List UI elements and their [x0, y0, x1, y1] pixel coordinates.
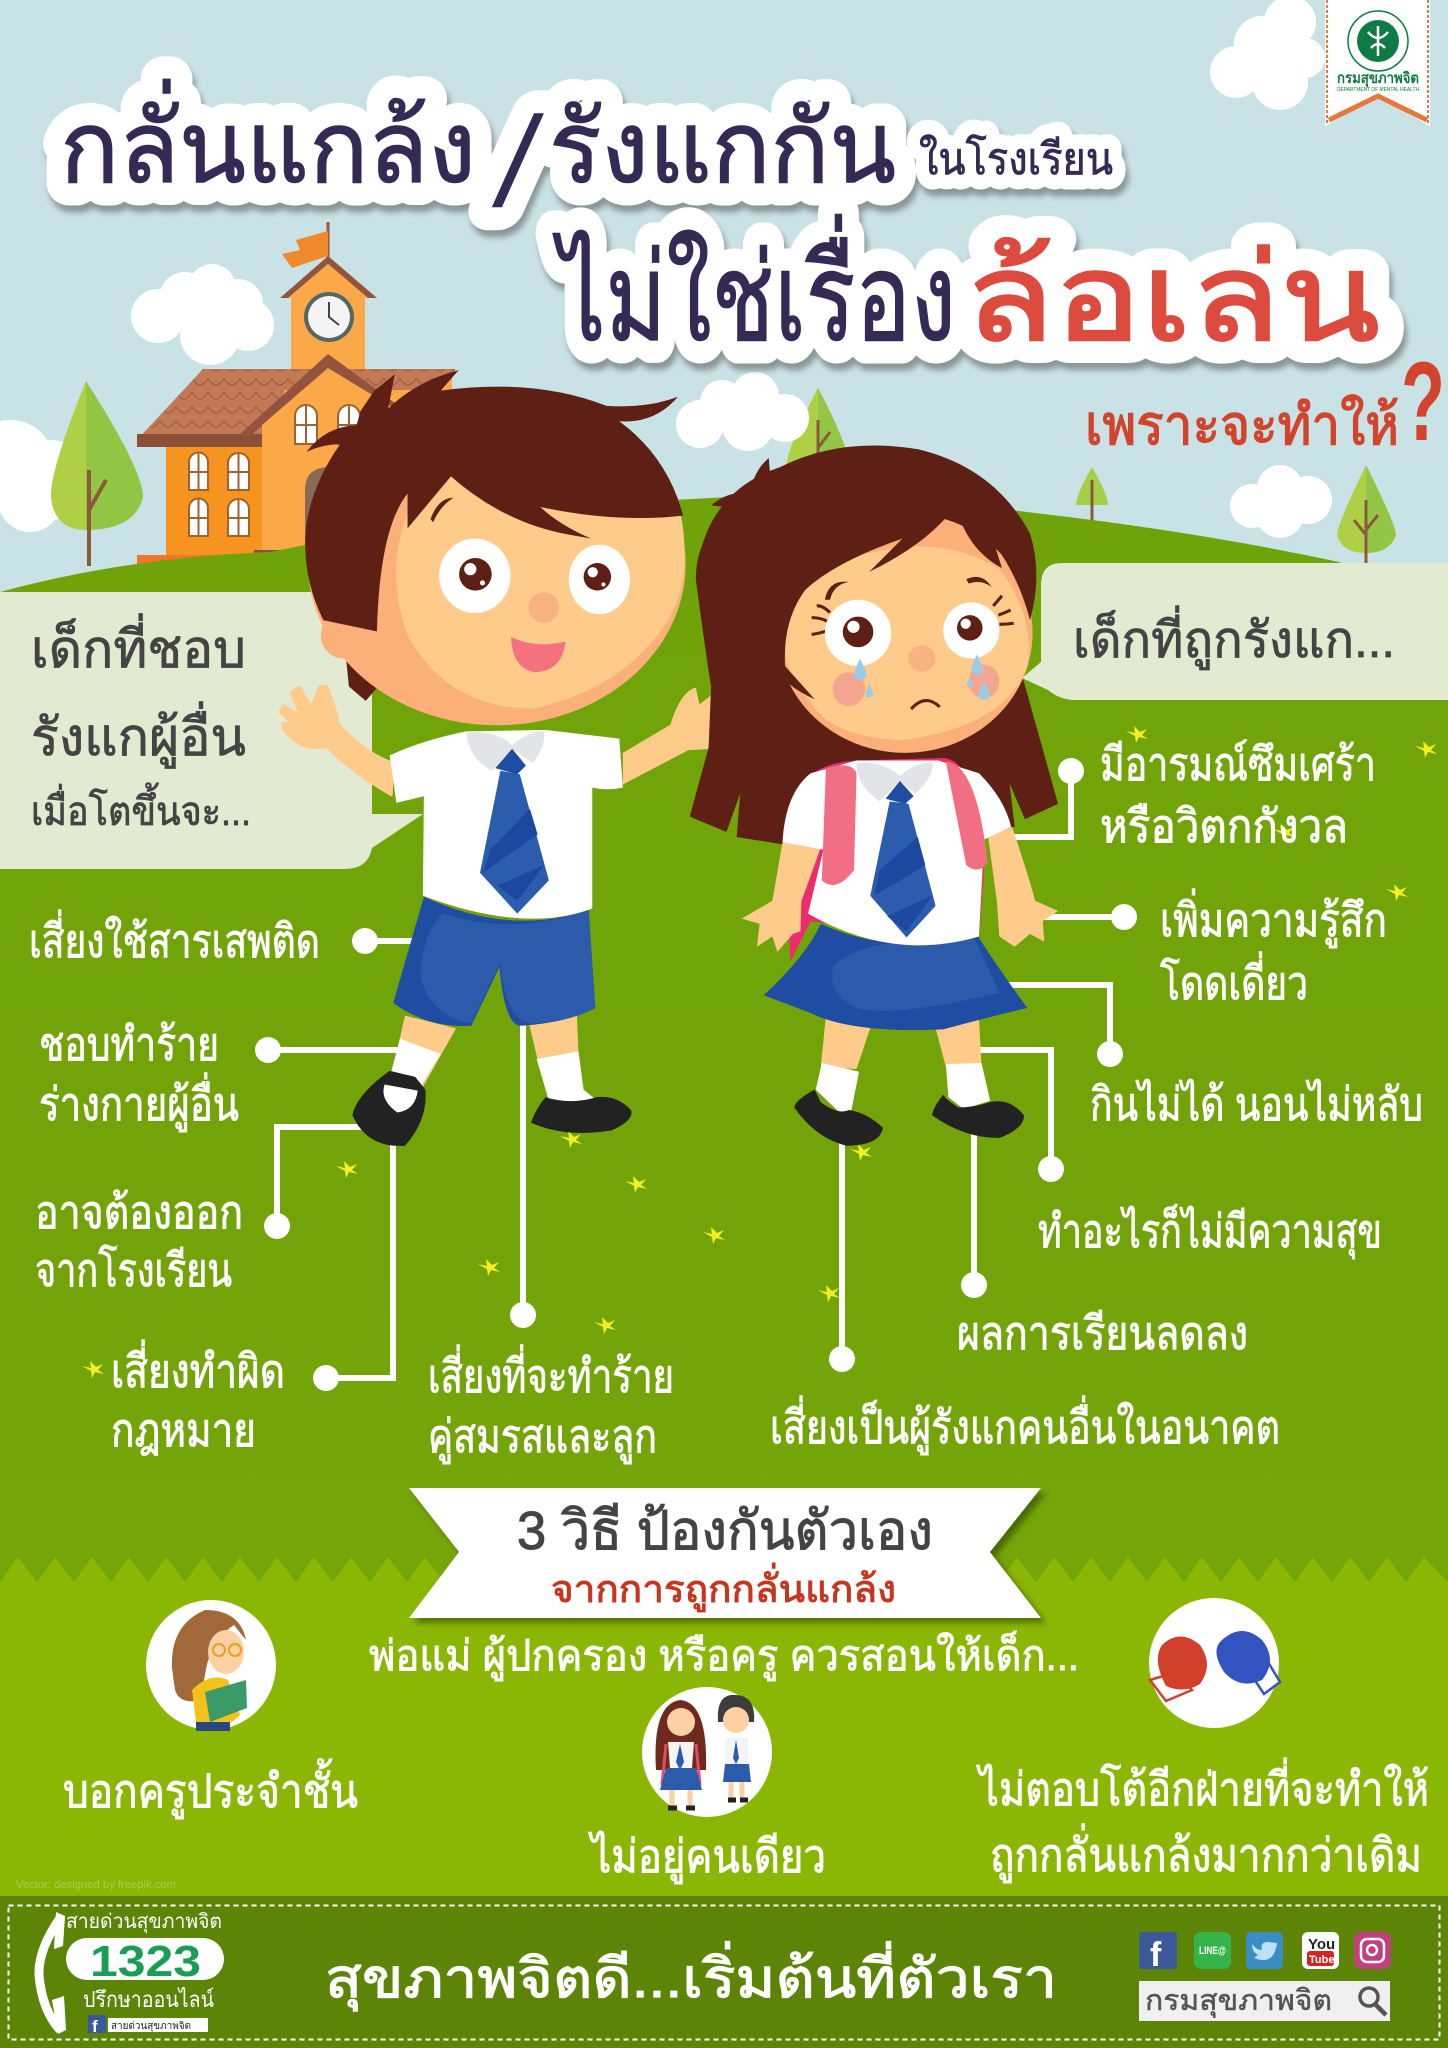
icon: teacher — [146, 1600, 276, 1731]
sky background — [0, 0, 1448, 640]
character: boy — [280, 370, 713, 1146]
cloud: beside school — [131, 264, 274, 365]
right bubble text: เด็กที่ถูกรังแก... — [1073, 606, 1395, 670]
title: ไม่ใช่เรื่อง — [552, 214, 956, 366]
hotline block: 1323 — [90, 1937, 201, 1986]
left bubble text: รังแกผู้อื่น — [31, 701, 246, 769]
bully outcomes list: อาจต้องออก — [35, 1186, 243, 1238]
victim outcomes list: โดดเดี่ยว — [1160, 951, 1308, 1009]
social icons: f — [1150, 1936, 1162, 1974]
advice labels: ไม่อยู่คนเดียว — [588, 1830, 826, 1884]
bully outcomes list: จากโรงเรียน — [35, 1244, 232, 1296]
title: ในโรงเรียน — [919, 134, 1113, 184]
ribbon banner: 3 ways: จากการถูกกลั่นแกล้ง — [551, 1563, 896, 1612]
green hill and lawn — [0, 497, 1448, 1600]
image credit: Vector: designed by freepik.com — [16, 1879, 176, 1891]
left bubble text — [31, 613, 251, 834]
bully outcomes list: เสี่ยงทำผิด — [111, 1339, 285, 1397]
title: รังแกกัน — [549, 92, 896, 204]
left bubble text: เด็กที่ชอบ — [31, 613, 246, 679]
bully outcomes list: คู่สมรสและลูก — [428, 1410, 657, 1464]
title: กลั่นแกล้ง — [60, 79, 476, 204]
ribbon banner: 3 ways: 3 วิธี ป้องกันตัวเอง — [517, 1501, 933, 1561]
social icons: LINE@ — [1199, 1945, 1226, 1957]
footer slogan: สุขภาพจิตดี...เริ่มต้นที่ตัวเรา — [325, 1941, 1057, 2012]
victim outcomes list: เพิ่มความรู้สึก — [1160, 888, 1387, 948]
bully outcomes list — [29, 909, 674, 1464]
icon: boxing gloves — [1149, 1598, 1280, 1728]
title: / — [487, 91, 548, 234]
flowers scattered on lawn — [82, 726, 1437, 1378]
cloud: centre — [676, 372, 809, 451]
victim outcomes list — [770, 738, 1423, 1455]
victim outcomes list: ผลการเรียนลดลง — [957, 1307, 1248, 1359]
character: girl — [690, 446, 1058, 1146]
tree: small right — [1076, 467, 1108, 522]
title: ในโรงเรียน — [919, 134, 1113, 184]
social icons: You — [1308, 1936, 1335, 1953]
advice labels — [63, 1757, 1429, 1884]
victim outcomes list: เสี่ยงเป็นผู้รังแกคนอื่นในอนาคต — [770, 1395, 1280, 1455]
hotline block: ปรึกษาออนไลน์ — [83, 1987, 214, 2012]
hotline block: สายด่วนสุขภาพจิต — [111, 2021, 191, 2032]
tree: centre — [785, 388, 851, 475]
cloud: left edge — [0, 420, 98, 532]
title: กลั่นแกล้ง — [60, 79, 476, 204]
hotline block: สายด่วนสุขภาพจิต — [66, 1911, 222, 1934]
subtitle: because it causes: เพราะจะทำให้ — [1085, 394, 1399, 456]
hotline block: f — [92, 2017, 98, 2036]
school building — [137, 222, 456, 564]
subtitle: because it causes — [1085, 339, 1445, 464]
title: / — [487, 91, 548, 234]
tree: left — [51, 381, 143, 566]
advice intro: พ่อแม่ ผู้ปกครอง หรือครู ควรสอนให้เด็ก... — [369, 1631, 1079, 1681]
bully outcomes list: เสี่ยงที่จะทำร้าย — [428, 1344, 674, 1402]
speech bubble: right — [1022, 563, 1448, 700]
logo badge: Department of Mental Health: DEPARTMENT OF MENTAL HEALTH — [1337, 87, 1419, 93]
title: ล้อเล่น — [965, 230, 1380, 366]
hotline block — [39, 1911, 224, 2036]
lower lawn with grass teeth — [0, 1557, 1448, 1896]
logo badge: Department of Mental Health — [1325, 0, 1430, 126]
victim outcomes list: มีอารมณ์ซึมเศร้า — [1100, 738, 1376, 790]
victim outcomes list: หรือวิตกกังวล — [1100, 800, 1348, 852]
footer band — [0, 1896, 1448, 2048]
tree: far right — [1337, 465, 1396, 567]
ribbon banner: 3 ways — [409, 1488, 1041, 1618]
title: ไม่ใช่เรื่อง — [552, 214, 956, 366]
speech bubble: left — [0, 592, 423, 869]
bully outcomes list: ร่างกายผู้อื่น — [39, 1072, 239, 1132]
left bubble text: เมื่อโตขึ้นจะ... — [31, 782, 251, 834]
search box: กรมสุขภาพจิต — [1145, 1985, 1332, 2018]
bully outcomes list: ชอบทำร้าย — [39, 1018, 219, 1070]
advice labels: บอกครูประจำชั้น — [63, 1758, 358, 1819]
bully outcomes list: กฎหมาย — [111, 1404, 256, 1456]
social icons — [1139, 1932, 1391, 1974]
social icons: Tube — [1309, 1954, 1334, 1966]
bully outcomes list: เสี่ยงใช้สารเสพติด — [29, 909, 320, 967]
title: รังแกกัน — [549, 92, 896, 204]
cloud: top right — [1210, 0, 1325, 110]
icon: two children together — [642, 1687, 772, 1817]
logo badge: Department of Mental Health: กรมสุขภาพจิต — [1337, 69, 1419, 88]
connector lines and dots — [255, 758, 1137, 1391]
search box — [1139, 1981, 1390, 2021]
title — [60, 79, 1380, 366]
title: ล้อเล่น — [965, 230, 1380, 366]
cloud: right — [1230, 465, 1332, 538]
